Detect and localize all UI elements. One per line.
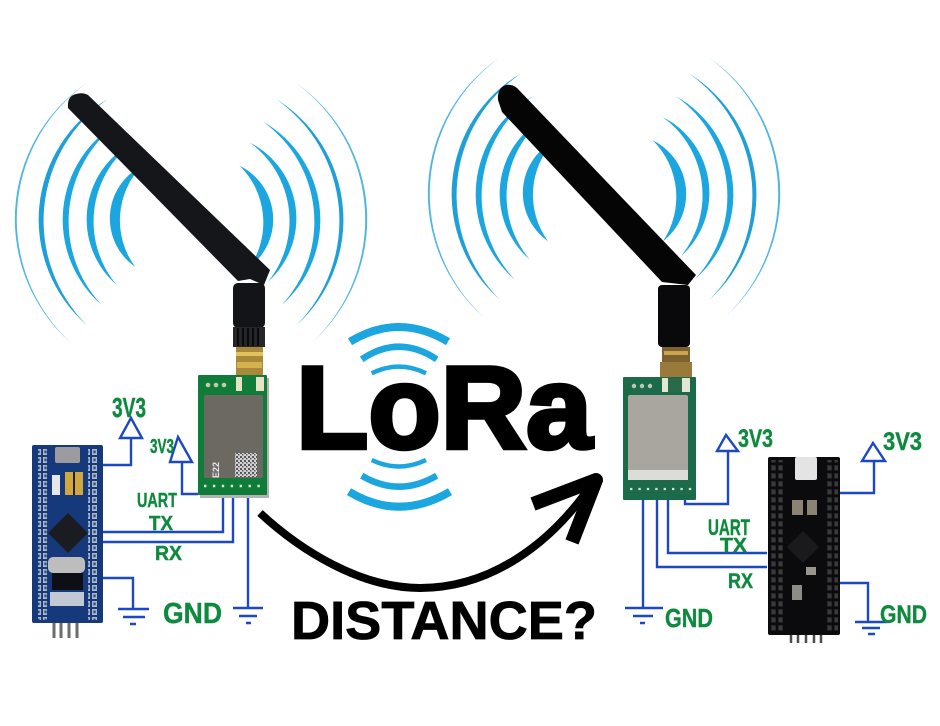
right handwritten labels: 3V3: [883, 428, 922, 456]
right black STM32 board: [768, 457, 840, 643]
left handwritten labels: GND: [163, 598, 222, 630]
LoRa wordmark waves: [349, 327, 450, 507]
right handwritten labels: GND: [880, 601, 927, 629]
right handwritten labels: GND: [665, 603, 713, 633]
left wiring schematic: [103, 418, 263, 624]
module QR code: [235, 453, 257, 477]
left handwritten labels: UART: [137, 490, 177, 512]
left blue STM32 board: [32, 445, 103, 638]
right handwritten labels: 3V3: [738, 425, 773, 453]
right wiring schematic: [625, 435, 887, 634]
module label: E22: [211, 462, 221, 478]
left handwritten labels: 3V3: [150, 436, 174, 458]
left antenna: [68, 93, 270, 375]
left E22 LoRa module: [198, 375, 269, 498]
right antenna: [498, 85, 696, 378]
left radio waves: [15, 83, 367, 343]
right handwritten labels: UART: [708, 515, 750, 540]
right handwritten labels: [665, 425, 927, 633]
right handwritten labels: TX: [720, 535, 748, 557]
right radio waves: [428, 58, 780, 318]
left handwritten labels: RX: [155, 543, 183, 565]
curved distance arrow: [260, 480, 596, 588]
left handwritten labels: 3V3: [112, 392, 146, 423]
left handwritten labels: TX: [149, 513, 174, 535]
DISTANCE heading: DISTANCE?: [291, 591, 597, 651]
LoRa title: LoRa: [296, 342, 593, 473]
right handwritten labels: RX: [728, 570, 753, 593]
right LoRa module: [623, 377, 696, 500]
left handwritten labels: [112, 392, 222, 630]
